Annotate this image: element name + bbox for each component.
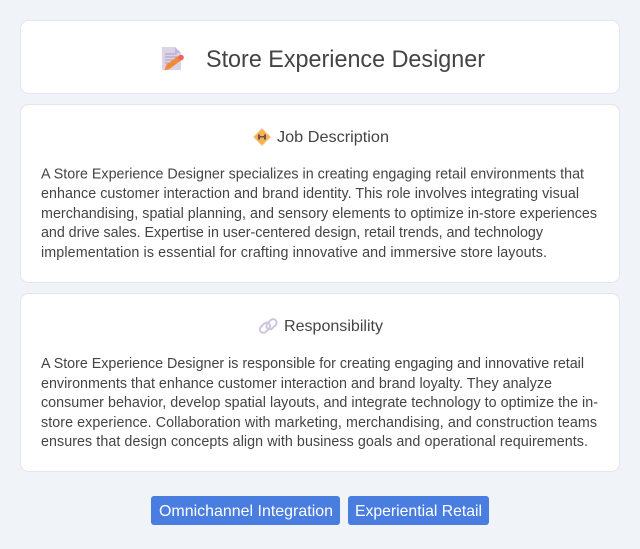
text block: job description: and drive sales. Expertise in user-centered design, retail trends, and technology [41, 225, 544, 241]
heading: job description: Job Description [277, 129, 389, 146]
panel: responsibility [20, 294, 620, 472]
text block: job description: enhance customer interaction and brand identity. This role involves integrating visual [41, 186, 579, 202]
heading: responsibility: Responsibility [284, 318, 383, 335]
icon: chain link [258, 318, 278, 334]
title: Store Experience Designer [206, 46, 485, 73]
text block: job description: A Store Experience Designer specializes in creating engaging retail environments that [41, 166, 584, 182]
tag: omnichannel integration: Omnichannel Integration [159, 503, 333, 520]
text block: job description: merchandising, spatial planning, and sensory elements to optimize in-store experiences [41, 206, 597, 222]
tag: experiential retail [348, 496, 489, 525]
tag: omnichannel integration [151, 496, 340, 525]
tag: experiential retail: Experiential Retail [355, 503, 482, 520]
text block: responsibility: A Store Experience Designer is responsible for creating engaging and innovative retail [41, 356, 584, 372]
panel: job description [20, 104, 620, 282]
panel: title card [20, 20, 620, 94]
text block: responsibility: consumer behavior, develop spatial layouts, and integrate technology to optimize the in- [41, 395, 598, 411]
text block: job description: implementation is essential for crafting innovative and immersive store layouts. [41, 245, 547, 261]
text block: job description [41, 166, 597, 261]
icon: diamond sign [254, 128, 270, 146]
text block: responsibility: environments that enhance customer interaction and brand loyalty. They analyze [41, 376, 552, 392]
text block: responsibility: ensures that design concepts align with business goals and operational requirements. [41, 434, 588, 450]
text block: responsibility [41, 356, 598, 450]
icon: document with pencil [162, 47, 184, 70]
text block: responsibility: store experience. Collaboration with marketing, merchandising, and construction teams [41, 415, 597, 431]
